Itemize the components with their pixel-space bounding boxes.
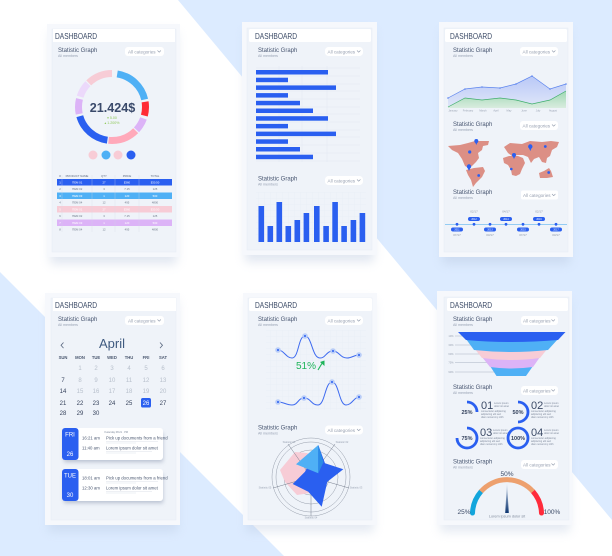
data table: 12 xyxy=(102,228,106,232)
heading: statistic graph xyxy=(258,48,297,58)
dropdown 3: All categories xyxy=(523,462,551,467)
area chart: February xyxy=(463,108,474,112)
calendar: 10 xyxy=(109,378,116,384)
data table: 1 xyxy=(59,180,61,184)
data table: 4800 xyxy=(152,228,159,232)
heading: statistic graph 2 xyxy=(453,385,492,395)
calendar: 25 xyxy=(126,401,133,407)
event card: tuesday: 30 xyxy=(67,493,74,499)
data table: 3 xyxy=(103,187,105,191)
dropdown xyxy=(325,47,363,56)
radar chart xyxy=(259,438,363,520)
data table: ITEM 04 xyxy=(72,200,83,204)
dropdown 2 xyxy=(520,121,558,130)
progress ring: 75%: adipiscing elit sed xyxy=(480,440,500,443)
area chart: July xyxy=(536,108,541,112)
timeline: 2017 xyxy=(553,228,559,232)
calendar: 19 xyxy=(143,389,150,395)
data table: 27 xyxy=(102,207,106,211)
data table: ITEM 02 xyxy=(72,214,83,218)
event card: tuesday: Lorem ipsum dolor sit amet xyxy=(106,486,159,491)
progress ring: 75%: Lorem ipsum xyxy=(493,429,507,432)
header bar: DASHBOARD xyxy=(255,300,297,310)
dropdown: All categories xyxy=(128,49,156,54)
funnel labels: 10% xyxy=(448,334,454,338)
data table: # xyxy=(59,174,61,178)
data table: 8 xyxy=(59,228,61,232)
data table: 120 xyxy=(125,194,130,198)
panel: area, map and timeline dashboard xyxy=(439,22,573,264)
timeline: 02/17 xyxy=(535,210,543,214)
donut value xyxy=(90,101,135,125)
heading: statistic graph: All members xyxy=(453,323,473,327)
progress ring: 25%: dolor sit amet xyxy=(494,405,509,408)
calendar: SUN xyxy=(59,355,67,360)
heading: statistic graph 3 xyxy=(453,190,492,200)
heading: statistic graph xyxy=(58,317,97,327)
progress ring: 50%: Lorem ipsum xyxy=(544,402,558,405)
heading: statistic graph 2: Statistic Graph xyxy=(453,122,492,128)
dropdown xyxy=(521,316,558,325)
panel: funnel, progress and gauge dashboard xyxy=(437,291,572,532)
heading: statistic graph: All members xyxy=(58,54,78,58)
event card: friday: Yesterday 08:21 · PM xyxy=(104,431,128,434)
timeline xyxy=(445,210,567,237)
dropdown xyxy=(325,316,363,325)
event card: friday: 26 xyxy=(67,452,74,458)
progress ring: 25%: 25% xyxy=(461,410,473,416)
calendar: 21 xyxy=(60,401,67,407)
dropdown 3 xyxy=(521,190,558,200)
data table: PRICE xyxy=(123,174,131,178)
heading: statistic graph 2: All members xyxy=(258,182,278,186)
data table: 3 xyxy=(59,194,61,198)
funnel labels: 30% xyxy=(448,343,454,347)
donut chart xyxy=(78,74,146,140)
heading: statistic graph: All members xyxy=(258,323,278,327)
radar chart: Statistic 05 xyxy=(259,486,272,490)
data table: 495 xyxy=(125,228,130,232)
heading: statistic graph 2 xyxy=(258,176,297,186)
data table: 7.15 xyxy=(124,214,130,218)
timeline: 07/17 xyxy=(453,233,461,237)
heading: statistic graph 3 xyxy=(453,460,492,470)
calendar: 28 xyxy=(60,411,67,417)
timeline: 02/17 xyxy=(470,210,478,214)
progress ring: 75%: consectetur adipiscing xyxy=(480,437,505,440)
world map with pins xyxy=(448,139,559,187)
area chart: June xyxy=(521,108,527,112)
calendar: 4 xyxy=(127,366,131,372)
progress ring: 25% xyxy=(457,400,509,422)
progress ring: 50%: consectetur adipiscing xyxy=(531,410,556,413)
event card: friday: Lorem ipsum dolor sit amet xyxy=(106,446,159,451)
header bar xyxy=(53,298,176,311)
dropdown 2 xyxy=(521,386,558,395)
data table: 4800 xyxy=(152,200,159,204)
dropdown: All categories xyxy=(328,49,356,54)
header bar xyxy=(447,298,568,311)
heading: statistic graph: Statistic Graph xyxy=(258,317,297,323)
gauge chart: 50% xyxy=(500,471,514,478)
calendar: 17 xyxy=(109,389,116,395)
progress ring: 75%: dolor sit amet xyxy=(493,432,508,435)
panel: bar charts dashboard xyxy=(242,22,377,262)
area chart xyxy=(447,75,567,112)
progress ring: 100%: 04 xyxy=(531,427,543,439)
header bar xyxy=(53,29,175,42)
radar chart: Statistic 04 xyxy=(305,516,318,520)
header bar: DASHBOARD xyxy=(450,31,492,41)
line chart 2 xyxy=(275,379,362,405)
radar chart: Statistic 03 xyxy=(350,486,363,490)
timeline: 2015 xyxy=(520,228,526,232)
calendar: 15 xyxy=(77,389,84,395)
calendar xyxy=(59,336,167,417)
event card: friday: Pick up documents from a friend xyxy=(106,436,168,441)
progress ring: 75%: 75% xyxy=(461,436,473,442)
dropdown 2: All categories xyxy=(328,178,356,183)
calendar: 16 xyxy=(93,389,100,395)
calendar: 1 xyxy=(78,366,82,372)
heading: statistic graph xyxy=(58,48,97,58)
progress ring: 75%: diam nonummy nibh xyxy=(480,443,503,446)
dropdown 2: All categories xyxy=(328,428,356,433)
column chart xyxy=(256,192,366,244)
heading: statistic graph 2: All members xyxy=(258,432,278,436)
progress ring: 25%: 01 xyxy=(481,400,493,412)
header bar: DASHBOARD xyxy=(55,31,97,41)
calendar: 13 xyxy=(160,378,167,384)
data table: ITEM 04 xyxy=(72,228,83,232)
calendar: 27 xyxy=(160,401,167,407)
data table: $360 xyxy=(124,207,131,211)
progress ring: 50%: 50% xyxy=(512,410,524,416)
data table: PRODUCT NAME xyxy=(66,174,88,178)
heading: statistic graph 3: All members xyxy=(453,466,473,470)
donut value: 21.424$ xyxy=(90,101,135,115)
donut value: ▴ 1.200% xyxy=(104,121,120,125)
timeline: 07/17 xyxy=(519,233,527,237)
dropdown: All categories xyxy=(522,49,551,54)
heading: statistic graph 2 xyxy=(453,122,492,132)
progress ring: 100%: dolor sit amet xyxy=(544,432,559,435)
dropdown xyxy=(125,316,164,325)
dropdown xyxy=(125,47,164,56)
data table: 495 xyxy=(125,200,130,204)
dropdown 2: All categories xyxy=(523,388,551,393)
progress ring: 100%: 100% xyxy=(511,436,525,442)
heading: statistic graph: All members xyxy=(258,54,278,58)
data table: TOTAL xyxy=(151,174,160,178)
progress ring: 75%: 03 xyxy=(480,427,492,439)
heading: statistic graph xyxy=(453,48,492,58)
calendar: 9 xyxy=(94,378,98,384)
gauge chart xyxy=(457,471,561,518)
calendar: SAT xyxy=(159,355,167,360)
progress ring: 25%: consectetur adipiscing xyxy=(481,410,506,413)
event card: tuesday xyxy=(62,469,168,503)
heading: statistic graph xyxy=(258,317,297,327)
progress ring: 100%: adipiscing elit sed xyxy=(531,440,551,443)
month title: April xyxy=(99,336,125,351)
timeline: 03/17 xyxy=(486,233,494,237)
calendar: 18 xyxy=(126,389,133,395)
data table: QTY xyxy=(101,174,107,178)
data table: 4 xyxy=(59,200,61,204)
event card: friday xyxy=(62,428,168,462)
progress ring: 50%: adipiscing elit sed xyxy=(531,413,551,416)
dropdown 3 xyxy=(521,460,558,469)
progress ring: 25%: diam nonummy nibh xyxy=(481,416,504,419)
funnel chart xyxy=(448,332,566,376)
data table: 12 xyxy=(102,200,106,204)
calendar: 7 xyxy=(61,378,65,384)
data table: 5 xyxy=(59,207,61,211)
horizontal bar chart xyxy=(256,66,360,162)
area chart: May xyxy=(507,108,512,112)
dropdown 2 xyxy=(325,176,363,185)
area chart: March xyxy=(479,108,487,112)
timeline: 2012 xyxy=(471,218,477,221)
heading: statistic graph: Statistic Graph xyxy=(258,48,297,54)
event card: friday: FRI xyxy=(65,432,75,438)
heading: statistic graph 3: All members xyxy=(453,196,473,200)
calendar: 29 xyxy=(77,411,84,417)
progress ring: 50%: diam nonummy nibh xyxy=(531,416,554,419)
timeline: 2011 xyxy=(454,228,460,232)
event card: friday: 16:21 am xyxy=(82,436,100,441)
panel: calendar dashboard xyxy=(45,293,180,532)
dropdown xyxy=(520,47,558,56)
heading: statistic graph: Statistic Graph xyxy=(453,48,492,54)
progress ring: 50% xyxy=(508,400,559,422)
progress ring: 50%: 02 xyxy=(531,400,543,412)
donut value: ▾ 5.00 xyxy=(107,116,117,120)
calendar: 20 xyxy=(160,389,167,395)
data table: 6 xyxy=(59,214,61,218)
data table: 500 xyxy=(153,221,158,225)
event card: tuesday: TUE xyxy=(64,474,76,480)
calendar: FRI xyxy=(143,355,149,360)
dropdown: All categories xyxy=(328,318,356,323)
event card: tuesday: Pick up documents from a friend xyxy=(106,476,168,481)
data table: 27 xyxy=(102,180,106,184)
header bar: DASHBOARD xyxy=(255,31,297,41)
data table xyxy=(57,174,172,232)
panel: donut and table dashboard xyxy=(47,24,180,264)
calendar: 3 xyxy=(110,366,114,372)
calendar: 26 xyxy=(143,401,150,407)
radar chart: Statistic 02 xyxy=(336,440,349,444)
data table: $30.50 xyxy=(151,180,160,184)
calendar: WED xyxy=(107,355,117,360)
data table: ITEM 01 xyxy=(72,207,83,211)
header bar: DASHBOARD xyxy=(450,300,492,310)
calendar: 5 xyxy=(144,366,148,372)
gauge chart: 100% xyxy=(544,509,561,516)
heading: statistic graph 2: Statistic Graph xyxy=(453,385,492,391)
data table: 125 xyxy=(153,214,158,218)
header bar: DASHBOARD xyxy=(55,300,97,310)
dropdown 2 xyxy=(325,426,363,434)
calendar: MON xyxy=(75,355,85,360)
area chart: January xyxy=(448,108,458,112)
calendar: 2 xyxy=(94,366,98,372)
progress ring: 75% xyxy=(457,427,508,448)
heading: statistic graph: All members xyxy=(453,54,473,58)
heading: statistic graph 3: Statistic Graph xyxy=(453,190,492,196)
calendar: 22 xyxy=(77,401,84,407)
header bar xyxy=(249,29,371,42)
data table: 125 xyxy=(153,187,158,191)
calendar: 12 xyxy=(143,378,150,384)
data table: 7 xyxy=(59,221,61,225)
data table: $360 xyxy=(124,180,131,184)
radar chart: Statistic 01 xyxy=(283,440,296,444)
heading: statistic graph: All members xyxy=(58,323,78,327)
percentage callout xyxy=(296,360,324,372)
heading: statistic graph 2: All members xyxy=(453,391,473,395)
timeline: 2013 xyxy=(487,228,493,232)
calendar: 30 xyxy=(93,411,100,417)
event card: tuesday: 12:30 am xyxy=(82,486,100,491)
heading: statistic graph xyxy=(453,317,492,327)
data table: ITEM 01 xyxy=(72,180,83,184)
heading: statistic graph 2 xyxy=(258,426,297,436)
heading: statistic graph 2: Statistic Graph xyxy=(258,176,297,182)
funnel labels: 60% xyxy=(448,352,454,356)
progress ring: 100% xyxy=(508,427,559,448)
dropdown 2: All categories xyxy=(522,123,551,128)
data table: ITEM 03 xyxy=(72,221,83,225)
percentage callout: 51% xyxy=(296,361,316,372)
data table: 1 xyxy=(103,221,105,225)
dropdown: All categories xyxy=(523,318,551,323)
area chart: April xyxy=(493,108,499,112)
data table: 500 xyxy=(153,194,158,198)
heading: statistic graph: Statistic Graph xyxy=(453,317,492,323)
heading: statistic graph 2: All members xyxy=(453,128,473,132)
dropdown: All categories xyxy=(128,318,156,323)
progress ring: 50%: dolor sit amet xyxy=(544,405,559,408)
calendar: 14 xyxy=(60,389,67,395)
header bar xyxy=(445,29,567,42)
heading: statistic graph 2: Statistic Graph xyxy=(258,426,297,432)
heading: statistic graph: Statistic Graph xyxy=(58,48,97,54)
calendar: 24 xyxy=(109,401,116,407)
timeline: 03/17 xyxy=(552,233,560,237)
line chart 1 xyxy=(266,330,366,410)
funnel labels: 75% xyxy=(448,360,454,364)
progress ring: 25%: adipiscing elit sed xyxy=(481,413,501,416)
data table: 2 xyxy=(59,187,61,191)
calendar: TUE xyxy=(92,355,100,360)
data table: $30.50 xyxy=(151,207,160,211)
progress ring: 100%: consectetur adipiscing xyxy=(531,437,556,440)
calendar: 8 xyxy=(78,378,82,384)
calendar: 23 xyxy=(93,401,100,407)
dropdown 3: All categories xyxy=(523,193,551,198)
timeline: 04/17 xyxy=(502,210,510,214)
timeline: 2016 xyxy=(536,218,542,221)
data table: ITEM 02 xyxy=(72,187,83,191)
panel: line and radar dashboard xyxy=(243,293,377,532)
heading: statistic graph 3: Statistic Graph xyxy=(453,460,492,466)
data table: 7.15 xyxy=(124,187,130,191)
calendar: THU xyxy=(125,355,133,360)
calendar: 6 xyxy=(161,366,165,372)
progress ring: 100%: Lorem ipsum xyxy=(544,429,558,432)
legend dots xyxy=(88,150,136,160)
calendar: 11 xyxy=(126,378,133,384)
data table: 120 xyxy=(125,221,130,225)
progress ring: 100%: diam nonummy nibh xyxy=(531,443,554,446)
data table: 3 xyxy=(103,214,105,218)
funnel labels: 90% xyxy=(448,370,454,374)
heading: statistic graph: Statistic Graph xyxy=(58,317,97,323)
event card: tuesday: 18:01 am xyxy=(82,476,100,481)
funnel labels xyxy=(448,334,500,374)
progress ring: 25%: Lorem ipsum xyxy=(494,402,508,405)
area chart: August xyxy=(549,108,557,112)
gauge chart: 25% xyxy=(457,509,471,516)
header bar xyxy=(249,298,372,311)
data table: 1 xyxy=(103,194,105,198)
gauge chart: Lorem ipsum dolor sit xyxy=(489,514,526,518)
data table: ITEM 03 xyxy=(72,194,83,198)
timeline: 2014 xyxy=(503,218,509,221)
event card: friday: 11:40 am xyxy=(82,446,100,451)
